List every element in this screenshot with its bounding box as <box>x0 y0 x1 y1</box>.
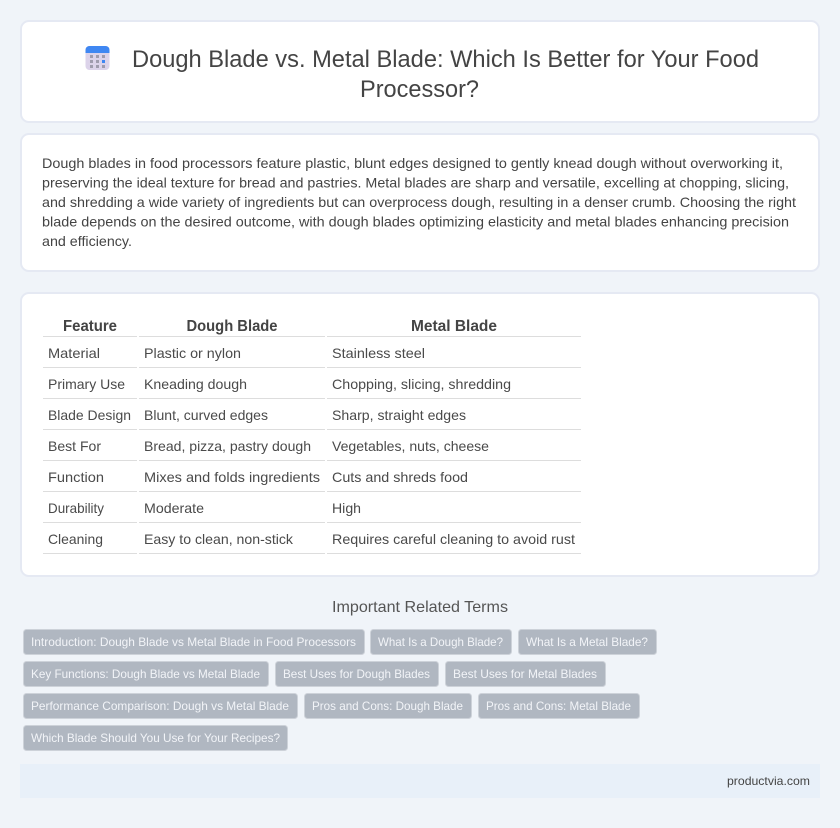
row: function <box>43 469 581 492</box>
heading: important related terms: Important Related Terms <box>332 599 508 616</box>
row: blade design: Blunt, curved edges <box>144 407 268 423</box>
table header <box>43 318 581 336</box>
text block: intro: Dough blades in food processors feature plastic, blunt edges designed to gently knead dough without overworking it, <box>42 155 783 171</box>
text block: intro <box>42 155 796 249</box>
row: function: Function <box>48 469 104 485</box>
tag row 1 <box>24 630 656 654</box>
text block: intro: blade depends on the desired outcome, with dough blades optimizing elasticity and metal blades enhancing precision <box>42 214 789 230</box>
row: blade design: Blade Design <box>48 407 131 423</box>
tag row 4: Which Blade Should You Use for Your Recipes? <box>31 731 280 745</box>
row: best for: Best For <box>48 438 101 454</box>
row: material: Stainless steel <box>332 345 425 361</box>
row: best for <box>43 438 581 460</box>
tag row 2: Best Uses for Dough Blades <box>283 667 430 681</box>
tag row 2: Best Uses for Metal Blades <box>453 667 597 681</box>
panel: comparison table <box>21 293 819 576</box>
row: primary use: Primary Use <box>48 376 125 392</box>
tag row 1: Introduction: Dough Blade vs Metal Blade in Food Processors <box>31 635 356 649</box>
row: durability: High <box>332 500 361 516</box>
tag row 2: Key Functions: Dough Blade vs Metal Blade <box>31 667 260 681</box>
tag row 3: Pros and Cons: Metal Blade <box>486 699 631 713</box>
row: durability <box>43 500 581 522</box>
row: durability: Durability <box>48 500 104 516</box>
title: Dough Blade vs. Metal Blade: Which Is Better for Your Food <box>132 46 759 73</box>
row: function: Cuts and shreds food <box>332 469 468 485</box>
title <box>132 46 759 103</box>
footer: productvia.com <box>727 774 810 788</box>
row: cleaning: Cleaning <box>48 531 103 547</box>
table header: Dough Blade <box>186 318 278 335</box>
row: cleaning: Easy to clean, non-stick <box>144 531 294 547</box>
row: blade design: Sharp, straight edges <box>332 407 466 423</box>
row: material <box>43 345 581 368</box>
tag row 1: What Is a Metal Blade? <box>526 635 648 649</box>
tag row 4 <box>24 726 288 750</box>
row: primary use <box>43 376 581 398</box>
tag row 3: Pros and Cons: Dough Blade <box>312 699 463 713</box>
panel: related term tags <box>24 630 656 750</box>
row: cleaning <box>43 531 581 554</box>
text block: intro: and shredding a wide variety of ingredients but can overprocess dough, resulting in a denser crumb. Choosing the right <box>42 194 796 210</box>
tag row 3: Performance Comparison: Dough vs Metal Blade <box>31 699 289 713</box>
text block: intro: preserving the ideal texture for bread and pastries. Metal blades are sharp and versatile, excelling at chopping, slicing, <box>42 174 789 190</box>
text block: intro: and efficiency. <box>42 233 132 249</box>
row: cleaning: Requires careful cleaning to avoid rust <box>332 531 575 547</box>
panel: header <box>21 21 819 122</box>
row: material: Material <box>48 345 100 361</box>
title: Processor? <box>360 76 479 103</box>
tag row 1: What Is a Dough Blade? <box>378 635 503 649</box>
tag row 3 <box>24 694 640 718</box>
row: primary use: Chopping, slicing, shredding <box>332 376 511 392</box>
row: best for: Bread, pizza, pastry dough <box>144 438 311 454</box>
icon: calendar <box>86 46 110 70</box>
row: function: Mixes and folds ingredients <box>144 469 320 485</box>
row: blade design <box>43 407 581 430</box>
row: best for: Vegetables, nuts, cheese <box>332 438 489 454</box>
table header: Metal Blade <box>411 318 497 335</box>
panel: intro paragraph <box>21 134 819 271</box>
row: durability: Moderate <box>144 500 204 516</box>
row: primary use: Kneading dough <box>144 376 247 392</box>
tag row 2 <box>24 662 606 686</box>
table header: Feature <box>63 318 117 335</box>
row: material: Plastic or nylon <box>144 345 241 361</box>
footer <box>20 764 820 798</box>
